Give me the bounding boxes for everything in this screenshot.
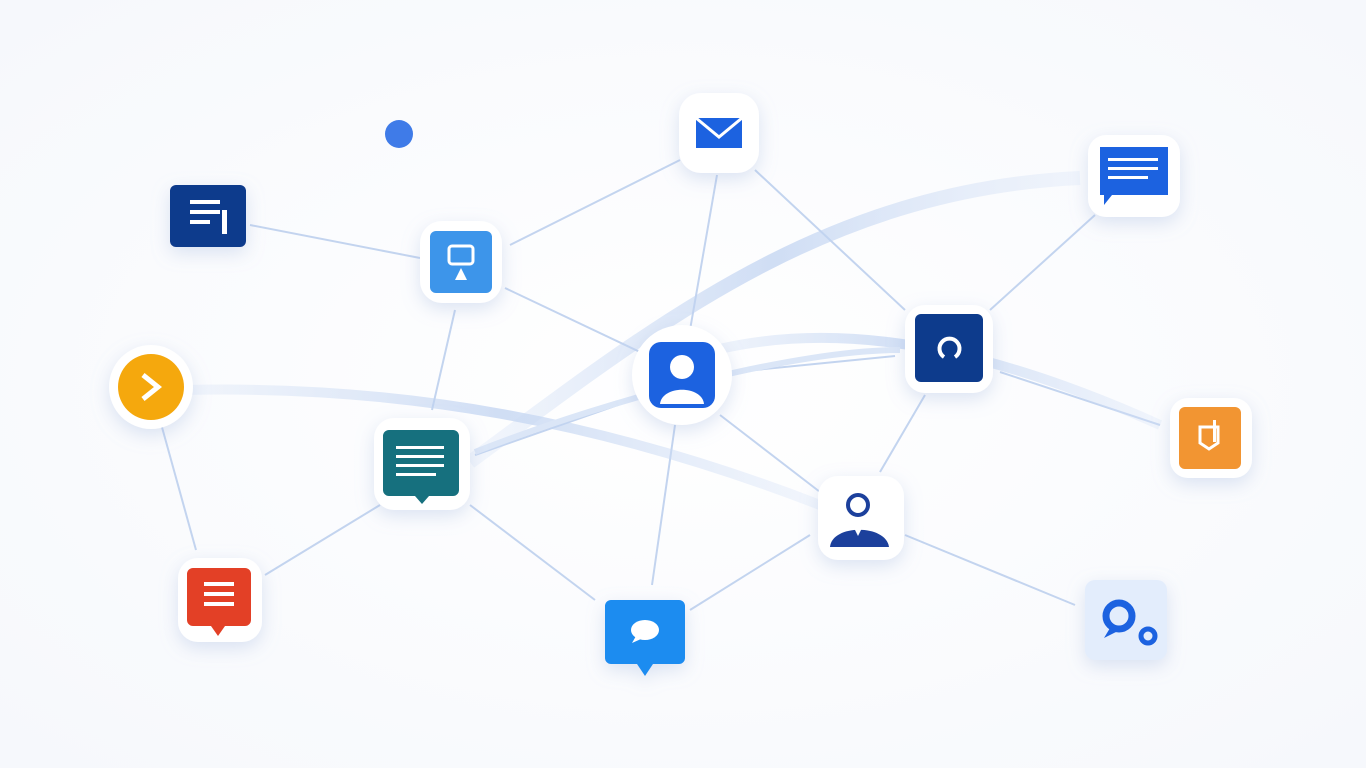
icon: blue dot (385, 120, 413, 148)
node: monitor (420, 221, 502, 303)
node: chat document top-right (1088, 135, 1180, 217)
node: red chat (178, 558, 262, 642)
curved arcs (185, 178, 1160, 505)
node: mail (679, 93, 759, 173)
node: orange (1170, 398, 1252, 478)
node: teal chat (374, 418, 470, 510)
connection lines (160, 160, 1160, 610)
node: yellow arrow (109, 345, 193, 429)
node: navy document (170, 185, 246, 247)
node: search (1085, 580, 1167, 660)
node: navy person (818, 476, 904, 560)
node: blue chat bubble (605, 600, 685, 676)
node: refresh (905, 305, 993, 393)
node: person center (632, 325, 732, 425)
